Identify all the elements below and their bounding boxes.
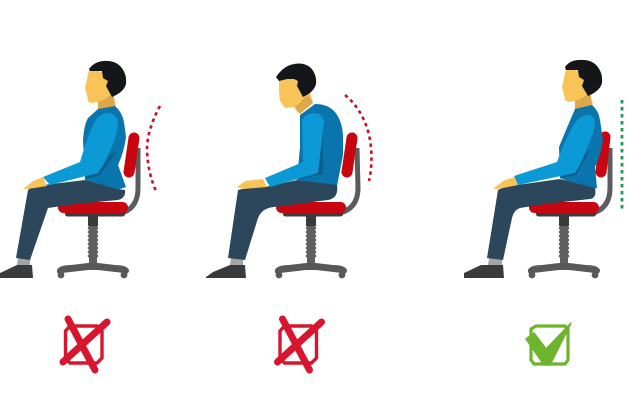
chair <box>528 137 610 278</box>
chair <box>275 138 358 278</box>
figure: correct upright posture <box>464 60 622 278</box>
icon: green check in box <box>526 323 571 365</box>
posture line: curved red dots <box>345 95 372 181</box>
icon: red cross in box <box>63 319 107 370</box>
person <box>0 61 126 278</box>
person <box>464 60 603 278</box>
chair <box>57 138 138 278</box>
posture line: straight green dots <box>621 100 623 210</box>
icon: red cross in box <box>278 319 322 370</box>
figure: slouched lower back posture <box>0 61 160 278</box>
posture line: curved red dots <box>147 106 160 193</box>
person <box>206 64 343 278</box>
figure: hunched upper back posture <box>206 64 372 278</box>
